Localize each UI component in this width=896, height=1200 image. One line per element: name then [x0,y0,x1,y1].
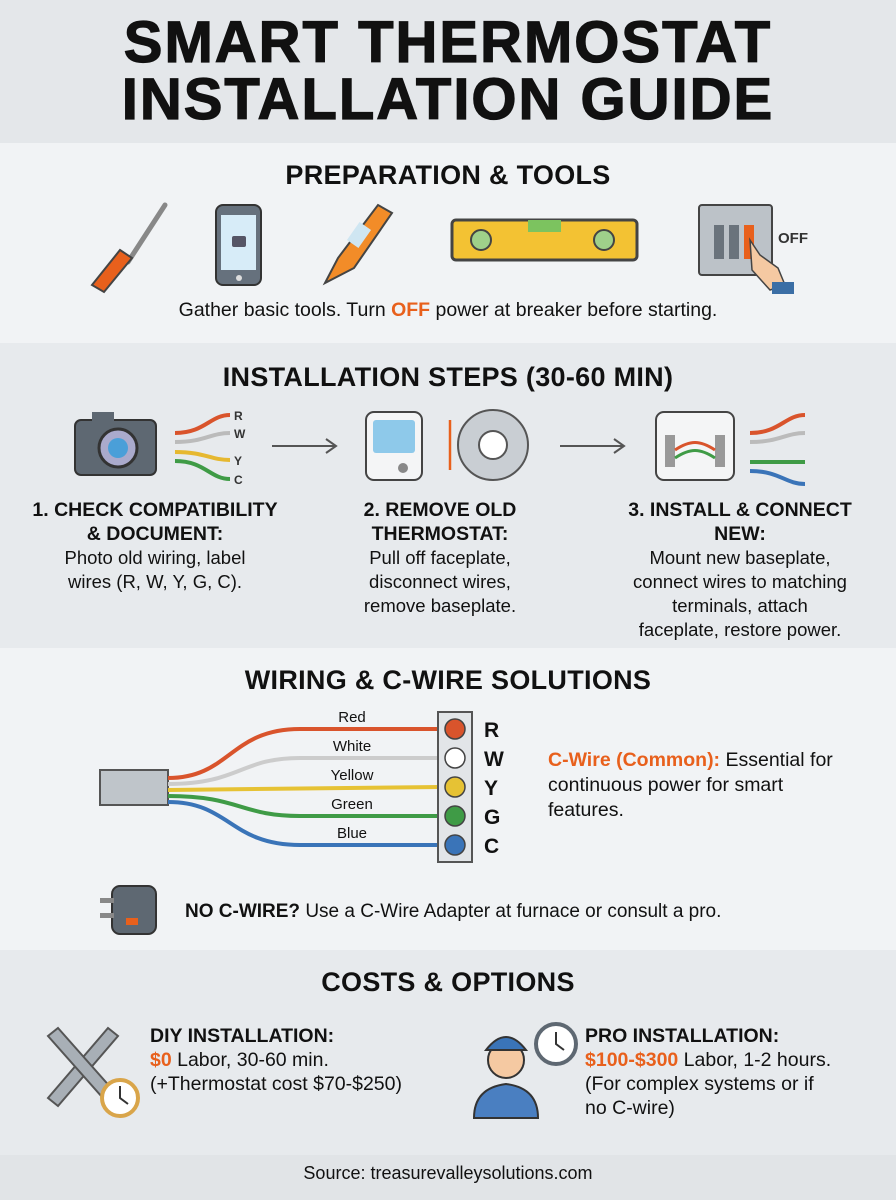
wiring diagram: C [484,835,499,858]
DIY text: (+Thermostat cost $70-$250) [150,1073,402,1095]
step 1 text: & DOCUMENT: [87,523,223,545]
arrow 2 [560,439,624,453]
caption: preparation: Gather basic tools. Turn OFF power at breaker before starting. [179,299,717,321]
DIY text: $0 Labor, 30-60 min. [150,1049,329,1071]
title: SMART THERMOSTAT [124,10,772,75]
c-wire note: C-Wire (Common): Essential for continuous power for smart features. [548,749,833,821]
arrow 1 [272,439,336,453]
heading: preparation & tools: PREPARATION & TOOLS [285,160,611,190]
step 3 text: connect wires to matching [633,571,847,592]
step 1 text: 1. CHECK COMPATIBILITY [32,499,278,521]
icon: old thermostat [366,410,528,480]
icon: breaker off: OFF [778,230,808,247]
icon: wrenches clock [46,1026,140,1118]
step 3 text: 3. INSTALL & CONNECT [628,499,852,521]
DIY text: DIY INSTALLATION: [150,1025,334,1047]
icon: level [452,220,637,260]
step 3 text: faceplate, restore power. [639,619,841,640]
wiring diagram: Green [331,796,373,813]
icon: screwdriver [92,205,165,292]
step 2 text: disconnect wires, [369,571,511,592]
icon: voltage tester [325,205,392,283]
icon: adapter [100,885,157,935]
step 3 text: terminals, attach [672,595,808,616]
wiring diagram: Yellow [331,767,374,784]
icon: labeled wires [175,415,230,479]
step 2 text: THERMOSTAT: [372,523,508,545]
step 2 text [364,499,516,616]
icon: phone [216,205,261,285]
title [122,10,774,132]
wiring diagram: G [484,806,500,829]
heading: wiring: WIRING & C-WIRE SOLUTIONS [245,665,651,695]
step 2 text: Pull off faceplate, [369,547,511,568]
step 3 text: NEW: [714,523,766,545]
icons: steps: Y [234,454,242,468]
step 1 text [32,499,278,592]
icons: steps [74,409,805,487]
step 2 text: 2. REMOVE OLD [364,499,516,521]
PRO text: $100-$300 Labor, 1-2 hours. [585,1049,831,1071]
icons: tools row [90,202,808,294]
icons: steps: R [234,409,243,423]
title: INSTALLATION GUIDE [122,67,774,132]
DIY text [150,1025,402,1095]
icon: breaker off [699,205,808,294]
wiring diagram: Red [338,709,366,726]
step 1 text: Photo old wiring, label [64,547,246,568]
PRO text [585,1025,831,1119]
icon: camera [75,412,156,475]
step 3 text [628,499,852,640]
heading: costs: COSTS & OPTIONS [321,967,575,997]
step 3 text: Mount new baseplate, [649,547,830,568]
adapter note: NO C-WIRE? Use a C-Wire Adapter at furnace or consult a pro. [185,901,721,922]
heading: installation steps: INSTALLATION STEPS (30-60 MIN) [223,362,673,392]
icon: pro worker [473,1022,578,1119]
wiring diagram [99,709,504,863]
step 1 text: wires (R, W, Y, G, C). [68,571,242,592]
wiring diagram: W [484,748,504,771]
wiring diagram: Y [484,777,498,800]
PRO text: PRO INSTALLATION: [585,1025,779,1047]
wiring diagram: R [484,719,499,742]
footer source: Source: treasurevalleysolutions.com [303,1163,593,1183]
icons: steps: C [234,473,243,487]
icons: steps: W [234,427,246,441]
wiring diagram: White [333,738,371,755]
step 2 text: remove baseplate. [364,595,516,616]
wiring diagram: Blue [337,825,367,842]
PRO text: no C-wire) [585,1097,675,1119]
icon: new baseplate [656,412,734,480]
PRO text: (For complex systems or if [585,1073,814,1095]
